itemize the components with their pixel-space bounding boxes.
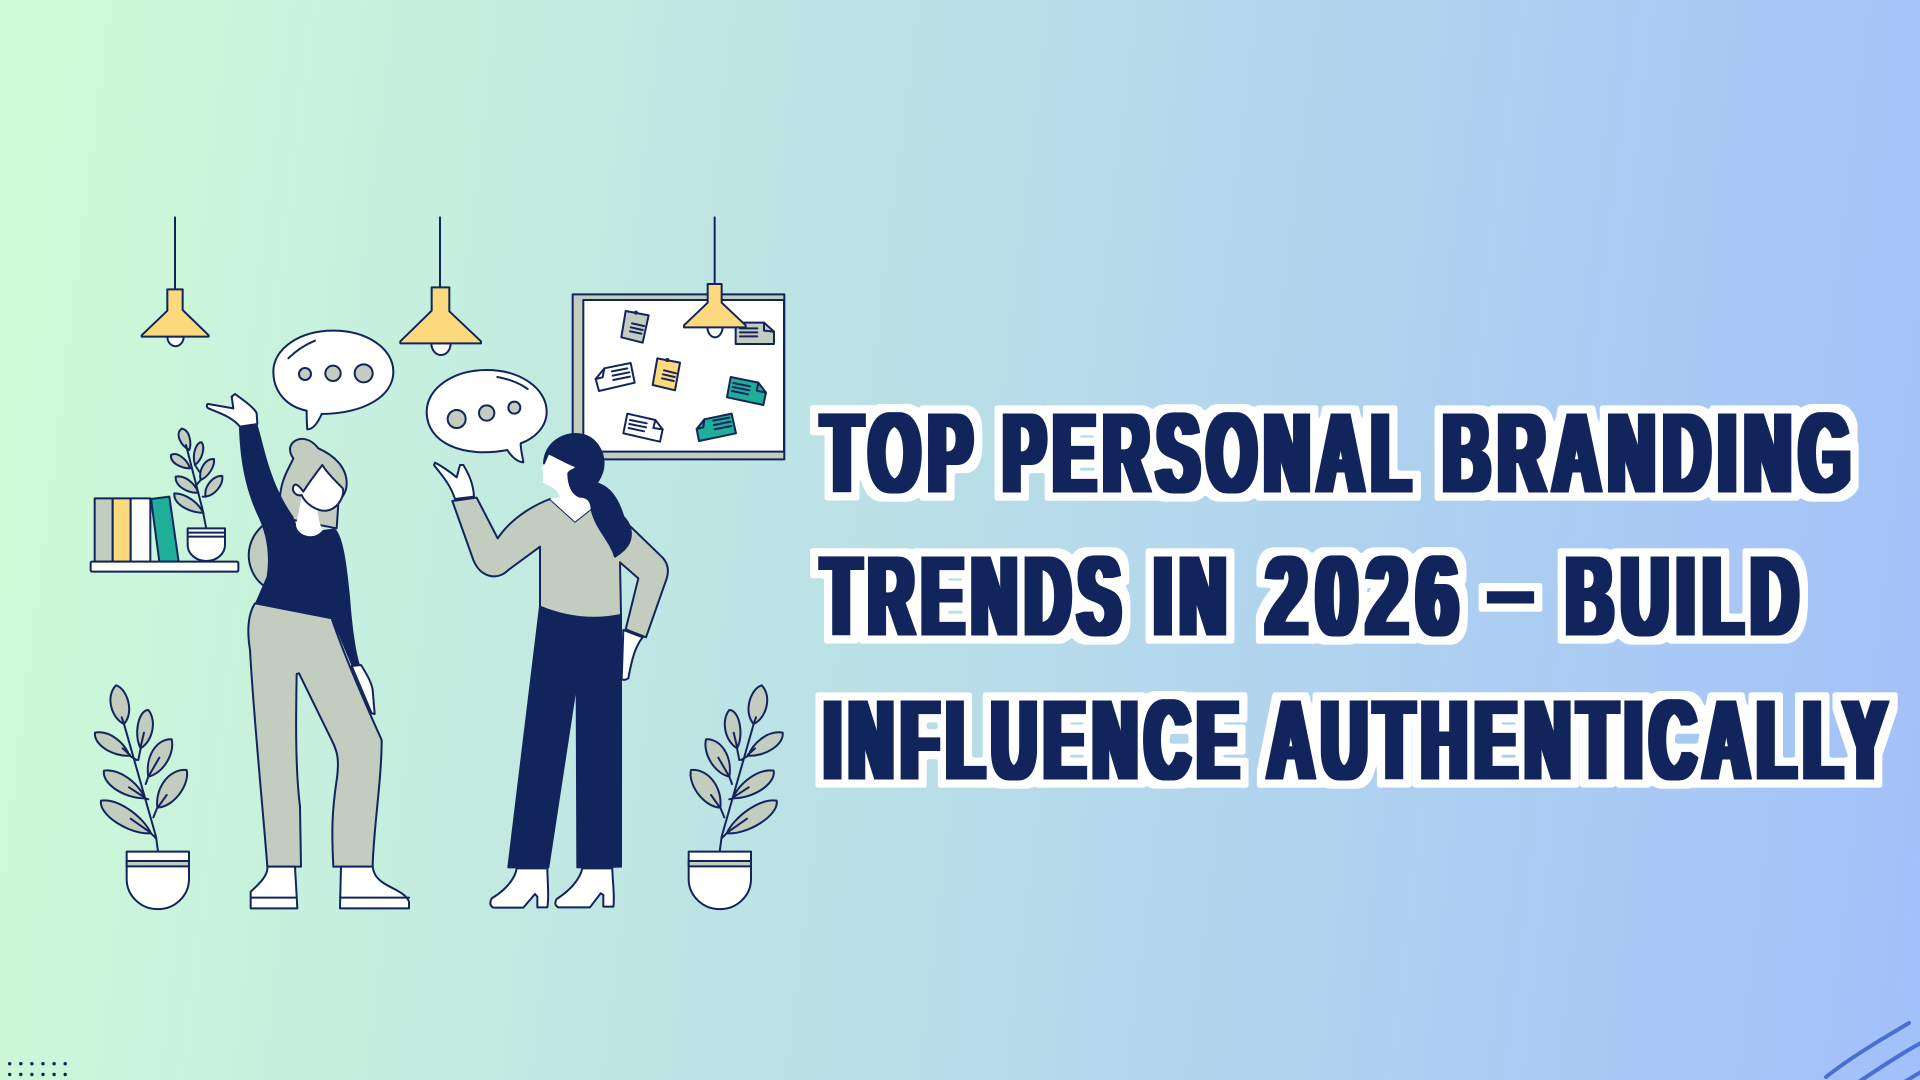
note white lower bbox=[623, 414, 663, 442]
title line 2: – bbox=[1489, 526, 1532, 652]
decorative corner strokes bbox=[1826, 1023, 1920, 1080]
title line 2: 2026 bbox=[1266, 533, 1467, 659]
floor plant left bbox=[95, 685, 189, 909]
title bbox=[822, 390, 1894, 803]
note sage folded bbox=[736, 323, 774, 344]
bookshelf with books bbox=[91, 497, 238, 572]
lamp 3 bbox=[684, 217, 746, 337]
woman with raised arm bbox=[207, 394, 409, 908]
note teal lower bbox=[697, 414, 736, 441]
woman with long hair bbox=[434, 434, 668, 908]
note yellow bbox=[653, 358, 680, 390]
pin board bbox=[573, 294, 784, 459]
title line 2: IN bbox=[1154, 533, 1234, 659]
floor plant right bbox=[689, 685, 783, 909]
decorative dot grid bbox=[8, 1062, 67, 1076]
title line 1: TOP bbox=[822, 390, 980, 516]
title line 2 bbox=[822, 526, 1806, 659]
note white folded left bbox=[596, 363, 635, 391]
speech bubble right bbox=[427, 370, 547, 462]
note teal right bbox=[727, 377, 766, 405]
lamp 1 bbox=[142, 217, 209, 346]
title line 1: PERSONAL bbox=[1003, 390, 1418, 516]
title line 3: INFLUENCE bbox=[824, 677, 1246, 803]
shelf plant bbox=[171, 429, 225, 561]
lamp 2 bbox=[400, 217, 481, 355]
title line 2: TRENDS bbox=[822, 533, 1128, 659]
note sage clipped bbox=[621, 311, 649, 343]
speech bubble left bbox=[273, 331, 393, 429]
